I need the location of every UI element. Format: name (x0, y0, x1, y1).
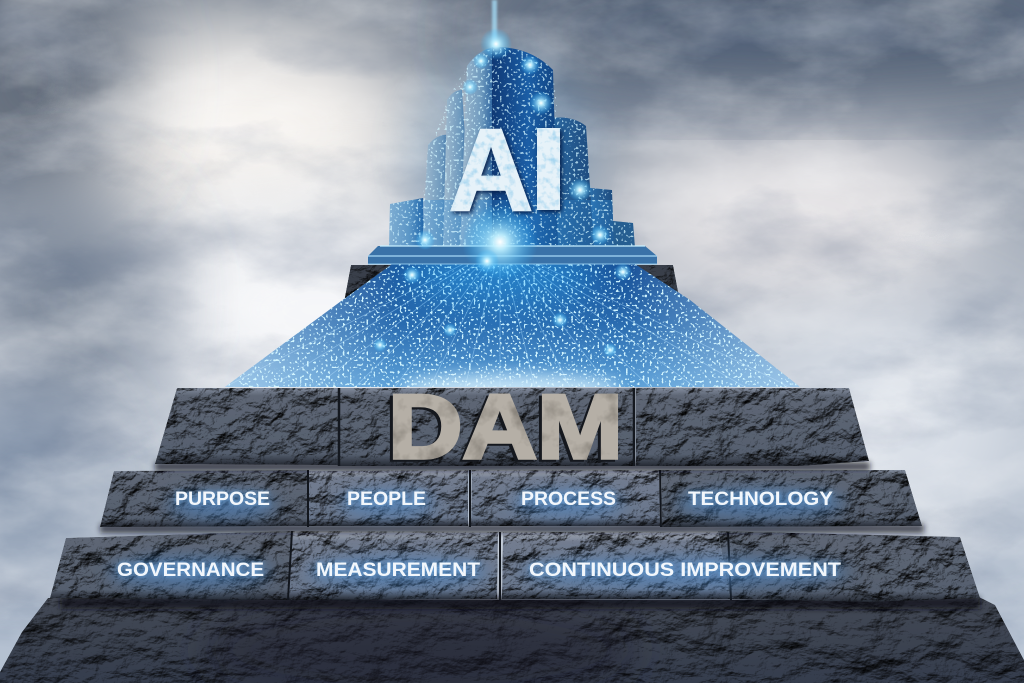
middle stone tier (100, 470, 924, 533)
shadow below the lower tier (60, 597, 980, 609)
shadow on the rock base (200, 595, 640, 683)
radial light lines (226, 264, 790, 387)
rock base (0, 592, 1024, 683)
label: measurement: MEASUREMENT (316, 560, 480, 581)
blue label glows (108, 489, 850, 587)
label: technology: TECHNOLOGY (688, 489, 833, 510)
stone pedestal behind the light field (344, 265, 680, 302)
AI lettering: A (449, 105, 533, 235)
label: people: PEOPLE (347, 489, 426, 510)
DAM lettering: DAM (388, 377, 623, 478)
label: purpose: PURPOSE (175, 489, 270, 510)
lower stone tier (50, 531, 980, 602)
label: process: PROCESS (521, 489, 616, 510)
label: continuous improvement: CONTINUOUS IMPROVEMENT (529, 560, 841, 581)
label: governance: GOVERNANCE (117, 560, 264, 581)
AI tower (385, 40, 640, 250)
upper stone tier (155, 388, 870, 471)
light sparks (373, 0, 632, 357)
glowing platform (368, 246, 657, 264)
blue light field (225, 264, 800, 387)
